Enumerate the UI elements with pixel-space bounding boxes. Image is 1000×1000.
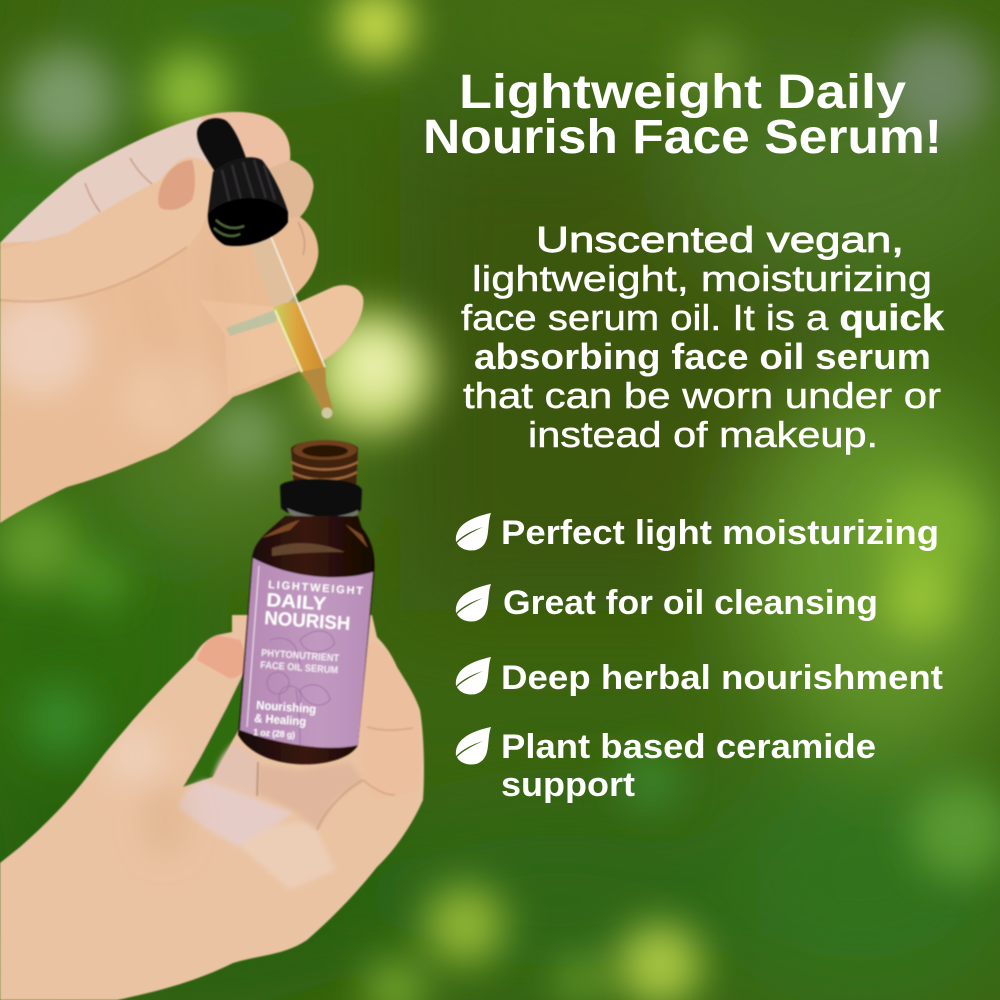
title: Nourish Face Serum! (423, 111, 942, 164)
background gap between thumb and palm (183, 670, 245, 787)
benefit: plant based ceramide support: support (501, 766, 635, 804)
label: Nourishing (256, 698, 317, 716)
label: 1 oz (28 g) (253, 727, 295, 740)
benefit: plant based ceramide support (456, 727, 876, 804)
lower hand holding bottle (0, 610, 430, 1000)
bottle (238, 440, 374, 764)
icon: leaf (456, 584, 491, 622)
icon: leaf (456, 657, 491, 695)
benefit: deep herbal nourishment: Deep herbal nourishment (501, 659, 943, 697)
palm shading (0, 297, 208, 433)
palm interior (177, 742, 363, 890)
description text: lightweight, moisturizing (472, 258, 932, 299)
icon: leaf (456, 513, 491, 551)
label: & Healing (254, 711, 307, 729)
description text (461, 219, 945, 455)
title: Lightweight Daily (459, 66, 906, 119)
label: LIGHTWEIGHT (268, 579, 364, 598)
rear fingers (268, 162, 363, 339)
label: FACE OIL SERUM (260, 660, 338, 676)
dropper (197, 118, 333, 419)
label: DAILY (266, 590, 327, 615)
bottle body (238, 516, 374, 764)
title (423, 66, 942, 164)
label (240, 558, 373, 748)
benefit: perfect light moisturizing: Perfect light moisturizing (501, 514, 939, 552)
benefit: great for oil cleansing: Great for oil cleansing (503, 584, 878, 622)
grey gap between fingers (226, 308, 280, 336)
description text: absorbing face oil serum (474, 336, 931, 377)
finger on right side (256, 676, 414, 830)
benefit: plant based ceramide support: Plant based ceramide (501, 728, 876, 766)
index finger back, pale (0, 112, 290, 243)
icon: leaf (456, 727, 491, 765)
description text: Unscented vegan, (536, 219, 904, 260)
upper hand holding dropper (0, 100, 370, 530)
description text: instead of makeup. (528, 414, 878, 455)
description text: face serum oil. It is a quick (461, 297, 945, 338)
shading (105, 727, 187, 856)
thumb (0, 157, 213, 302)
description text: that can be worn under or (463, 375, 941, 416)
thumb nail (197, 635, 245, 678)
bottle neck and collar (280, 440, 362, 521)
label: PHYTONUTRIENT (261, 648, 339, 664)
dropper cap (197, 118, 288, 246)
label: NOURISH (264, 608, 351, 635)
dropper glass pipette (247, 227, 333, 418)
